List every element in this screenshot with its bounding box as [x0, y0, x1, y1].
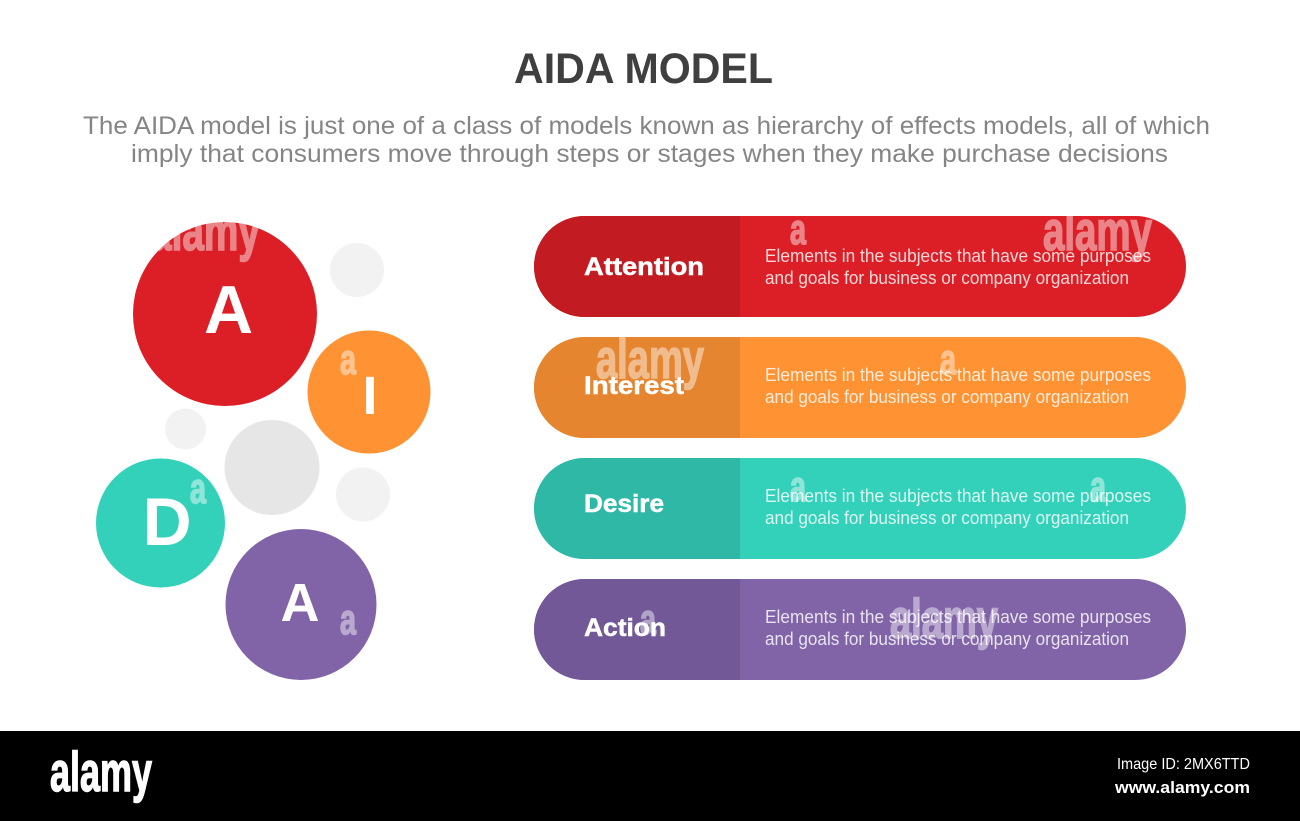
- circle: A attention: alamy: [150, 199, 260, 262]
- panel: desire: Desire: [584, 490, 664, 518]
- panel: desire: and goals for business or company organization: [765, 508, 1129, 528]
- panel: action: alamy: [890, 587, 998, 650]
- circle: D desire: D: [142, 484, 192, 560]
- panel: desire: a: [1090, 463, 1107, 511]
- circle: I interest: I: [362, 366, 378, 426]
- circle: A action: a: [340, 596, 357, 644]
- panel: interest: and goals for business or company organization: [765, 387, 1129, 407]
- circle: I interest: a: [340, 336, 357, 384]
- panel: action: Elements in the subjects that have some purposes: [765, 607, 1151, 627]
- circle: A attention: [133, 199, 317, 406]
- panel: attention: a: [790, 206, 807, 254]
- panel: attention: Elements in the subjects that have some purposes: [765, 246, 1151, 266]
- decorative grey bubbles: [165, 243, 390, 522]
- panel: interest: [534, 327, 1186, 438]
- subtitle text: The AIDA model is just one of a class of models known as hierarchy of effects models, all of which: [83, 112, 1210, 140]
- panel: interest: a: [940, 336, 957, 384]
- panel: attention: and goals for business or company organization: [765, 268, 1129, 288]
- subtitle text: imply that consumers move through steps or stages when they make purchase decisions: [131, 140, 1168, 168]
- panel: attention: alamy: [1043, 199, 1152, 262]
- subtitle text: [83, 112, 1210, 168]
- panel: action: a: [640, 596, 657, 644]
- panel: action: Action: [584, 614, 666, 642]
- title: AIDA MODEL: [514, 45, 773, 93]
- footer bar: www.alamy.com: [1114, 778, 1250, 797]
- circle: A action: A: [280, 573, 320, 633]
- circle: A attention: A: [204, 272, 253, 348]
- panel: interest: alamy: [596, 327, 704, 390]
- circle: A action: [226, 529, 376, 680]
- panel: interest: Interest: [584, 372, 685, 400]
- panel: interest: Elements in the subjects that have some purposes: [765, 365, 1151, 385]
- footer bar: [0, 731, 1300, 821]
- circle: D desire: a: [190, 465, 207, 513]
- panel: action: [534, 579, 1186, 680]
- panel: desire: [534, 458, 1186, 559]
- bubble diagram: [96, 199, 430, 680]
- circle: I interest: [308, 330, 430, 454]
- circle: D desire: [96, 458, 225, 588]
- footer bar: alamy: [50, 740, 152, 803]
- panel: attention: [534, 199, 1186, 317]
- panel: action: and goals for business or company organization: [765, 629, 1129, 649]
- panel: desire: a: [790, 463, 807, 511]
- footer bar: Image ID: 2MX6TTD: [1117, 756, 1250, 773]
- panel: attention: Attention: [584, 253, 704, 281]
- panel: desire: Elements in the subjects that have some purposes: [765, 486, 1151, 506]
